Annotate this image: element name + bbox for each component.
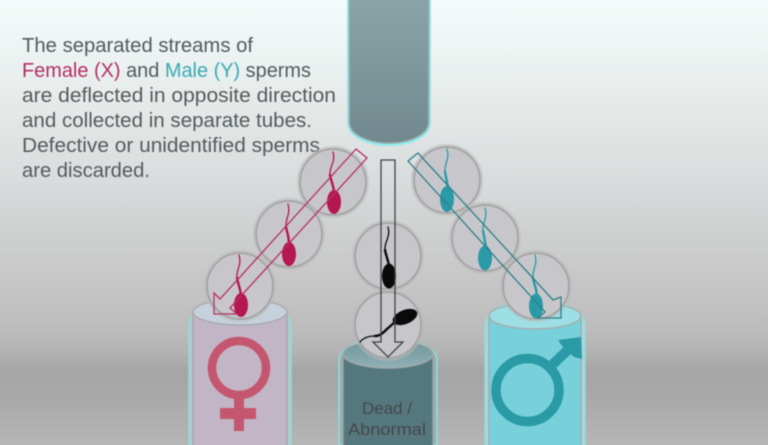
dead or abnormal collection tube xyxy=(339,338,437,445)
arrow: female deflection xyxy=(214,149,367,314)
explanatory text block: Defective or unidentified sperms xyxy=(22,135,320,157)
arrow: discard stream xyxy=(373,160,403,357)
explanatory text block: The separated streams of xyxy=(22,35,253,57)
tube label: Abnormal xyxy=(348,420,426,439)
male collection tube xyxy=(485,300,585,445)
illustration and text layer xyxy=(22,0,585,445)
explanatory text block: are deflected in opposite direction xyxy=(22,85,336,107)
male sperm cell 2 xyxy=(450,203,520,273)
tube label xyxy=(348,399,426,439)
tube label: Dead / xyxy=(362,399,412,418)
source tube xyxy=(347,0,431,146)
arrow: male deflection xyxy=(408,153,561,318)
explanatory text block: Female (X) and Male (Y) sperms xyxy=(22,60,311,82)
female sperm cell 2 xyxy=(254,199,324,269)
female collection tube xyxy=(189,299,291,445)
icon: female symbol xyxy=(212,341,266,431)
explanatory text block: are discarded. xyxy=(22,160,150,182)
male sperm cell 3 xyxy=(501,251,571,321)
female sperm cell 1 xyxy=(298,147,368,217)
explanatory text block: and collected in separate tubes. xyxy=(22,110,312,132)
explanatory text block xyxy=(22,35,336,182)
icon: male symbol xyxy=(496,337,582,422)
male sperm cell 1 xyxy=(412,145,482,215)
abnormal sperm cell 2 xyxy=(353,290,423,360)
abnormal sperm cell 1 xyxy=(353,221,423,291)
female sperm cell 3 xyxy=(205,251,275,321)
